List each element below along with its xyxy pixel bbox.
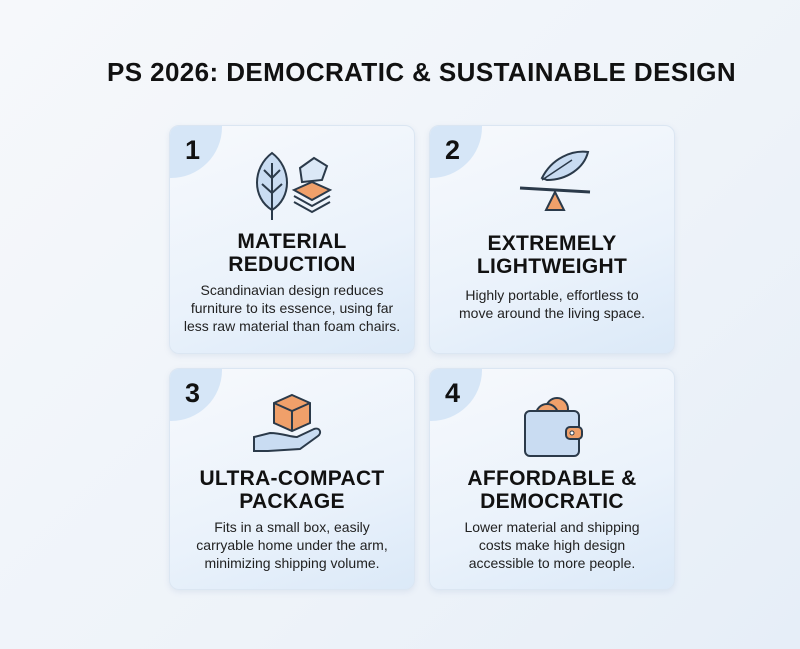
text: carryable home under the arm, [196,537,388,553]
title: PS 2026: DEMOCRATIC & SUSTAINABLE DESIGN [107,57,736,87]
icon: feather on balance [520,150,590,211]
text: accessible to more people. [469,555,635,571]
text [459,287,645,321]
heading: REDUCTION [228,253,356,276]
heading: DEMOCRATIC [480,490,624,513]
panel: compact package [169,368,415,590]
text: less raw material than foam chairs. [184,318,400,334]
text: Lower material and shipping [464,519,640,535]
icon: hand with box [253,394,322,452]
heading: AFFORDABLE & [467,467,637,490]
heading: EXTREMELY [487,232,617,255]
number 4: 4 [445,378,460,408]
number 2: 2 [445,135,460,165]
text: Highly portable, effortless to [465,287,639,303]
heading: ULTRA-COMPACT [199,467,385,490]
text: minimizing shipping volume. [204,555,380,571]
panel: material reduction [169,125,415,354]
heading [467,467,637,513]
number 3: 3 [185,378,200,408]
heading [477,232,627,278]
heading: PACKAGE [239,490,345,513]
text: costs make high design [479,537,625,553]
text [184,282,400,334]
text [464,519,640,571]
text: move around the living space. [459,305,645,321]
heading [199,467,385,513]
panel: affordable [429,368,675,590]
heading: MATERIAL [237,230,347,253]
icon: wallet with coins [524,397,583,457]
number 1: 1 [185,135,200,165]
text [196,519,388,571]
heading [228,230,356,276]
text: furniture to its essence, using far [191,300,393,316]
text: Fits in a small box, easily [214,519,370,535]
text: Scandinavian design reduces [201,282,383,298]
panel: lightweight [429,125,675,354]
heading: LIGHTWEIGHT [477,255,627,278]
icon: leaf and layers [256,152,332,220]
